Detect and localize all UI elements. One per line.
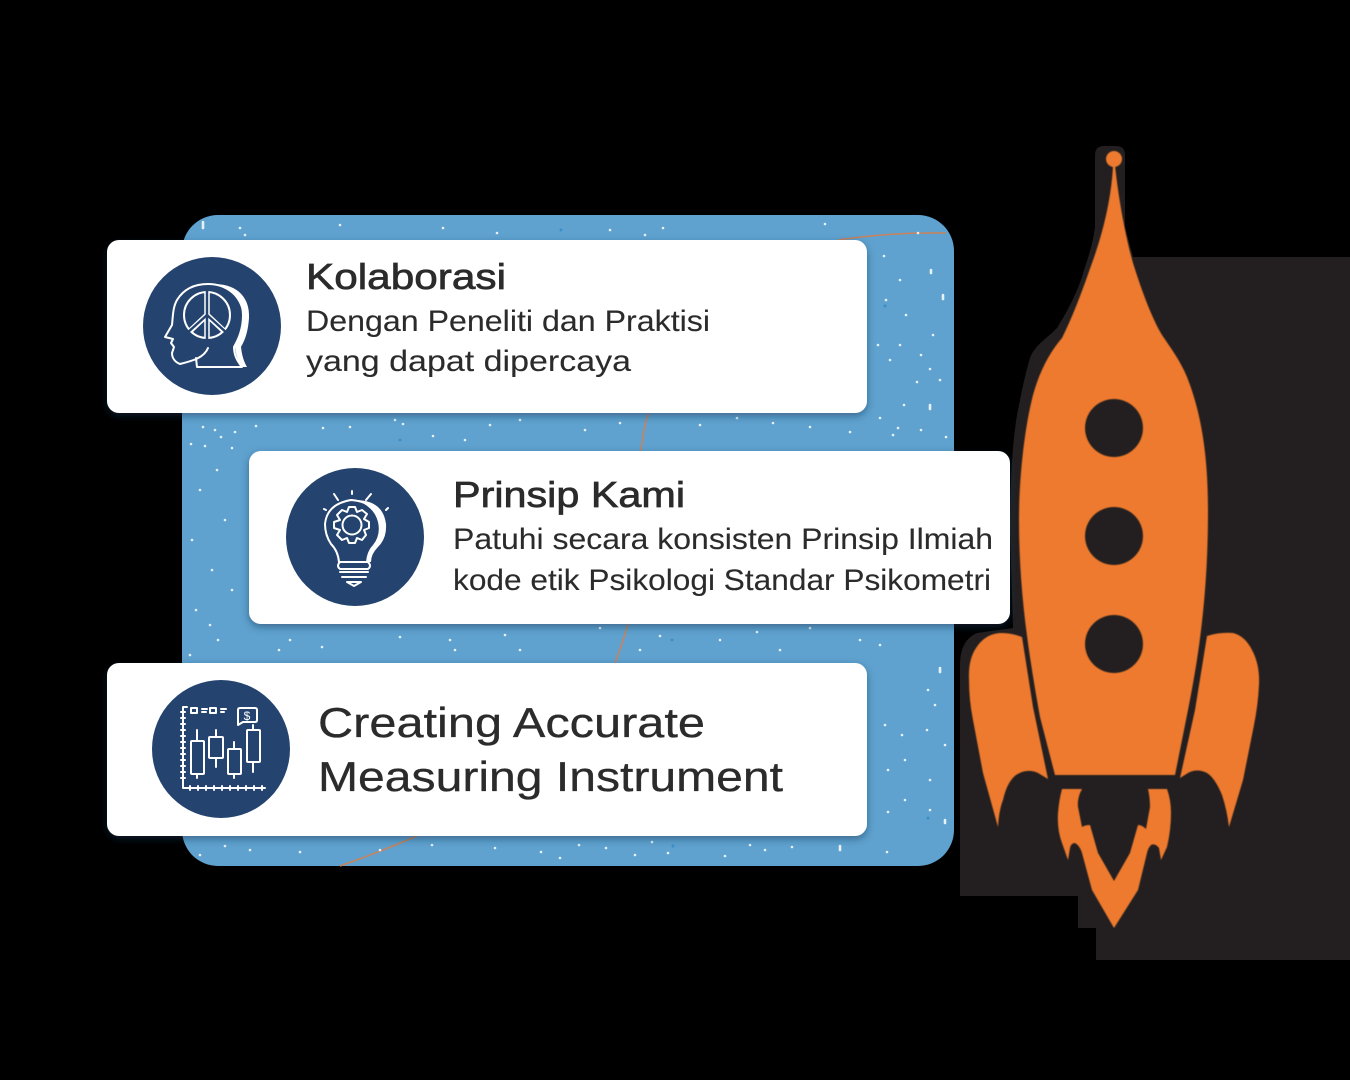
card: Prinsip Kami — [249, 451, 1010, 624]
dark backdrop behind rocket — [960, 146, 1350, 960]
flame — [1058, 789, 1171, 928]
icon: candlestick chart — [152, 680, 290, 818]
heading: Prinsip Kami — [453, 474, 685, 515]
icon: head with peace symbol — [143, 257, 281, 395]
text line: yang dapat dipercaya — [306, 345, 631, 378]
text line: Patuhi secara konsisten Prinsip Ilmiah — [453, 523, 993, 556]
heading: Kolaborasi — [306, 256, 506, 297]
icon text: dollar: $ — [244, 709, 251, 723]
text line: Dengan Peneliti dan Praktisi — [306, 305, 710, 338]
card: Creating Accurate Measuring Instrument — [107, 663, 867, 836]
left fin — [969, 633, 1048, 827]
panel: blue starfield background — [182, 215, 954, 866]
icon: light bulb with gear — [286, 468, 424, 606]
text line: kode etik Psikologi Standar Psikometri — [453, 564, 991, 597]
card: Kolaborasi — [107, 240, 867, 413]
heading line: Measuring Instrument — [318, 753, 783, 800]
right fin — [1180, 633, 1259, 827]
heading line: Creating Accurate — [318, 699, 705, 746]
rocket — [969, 151, 1259, 928]
